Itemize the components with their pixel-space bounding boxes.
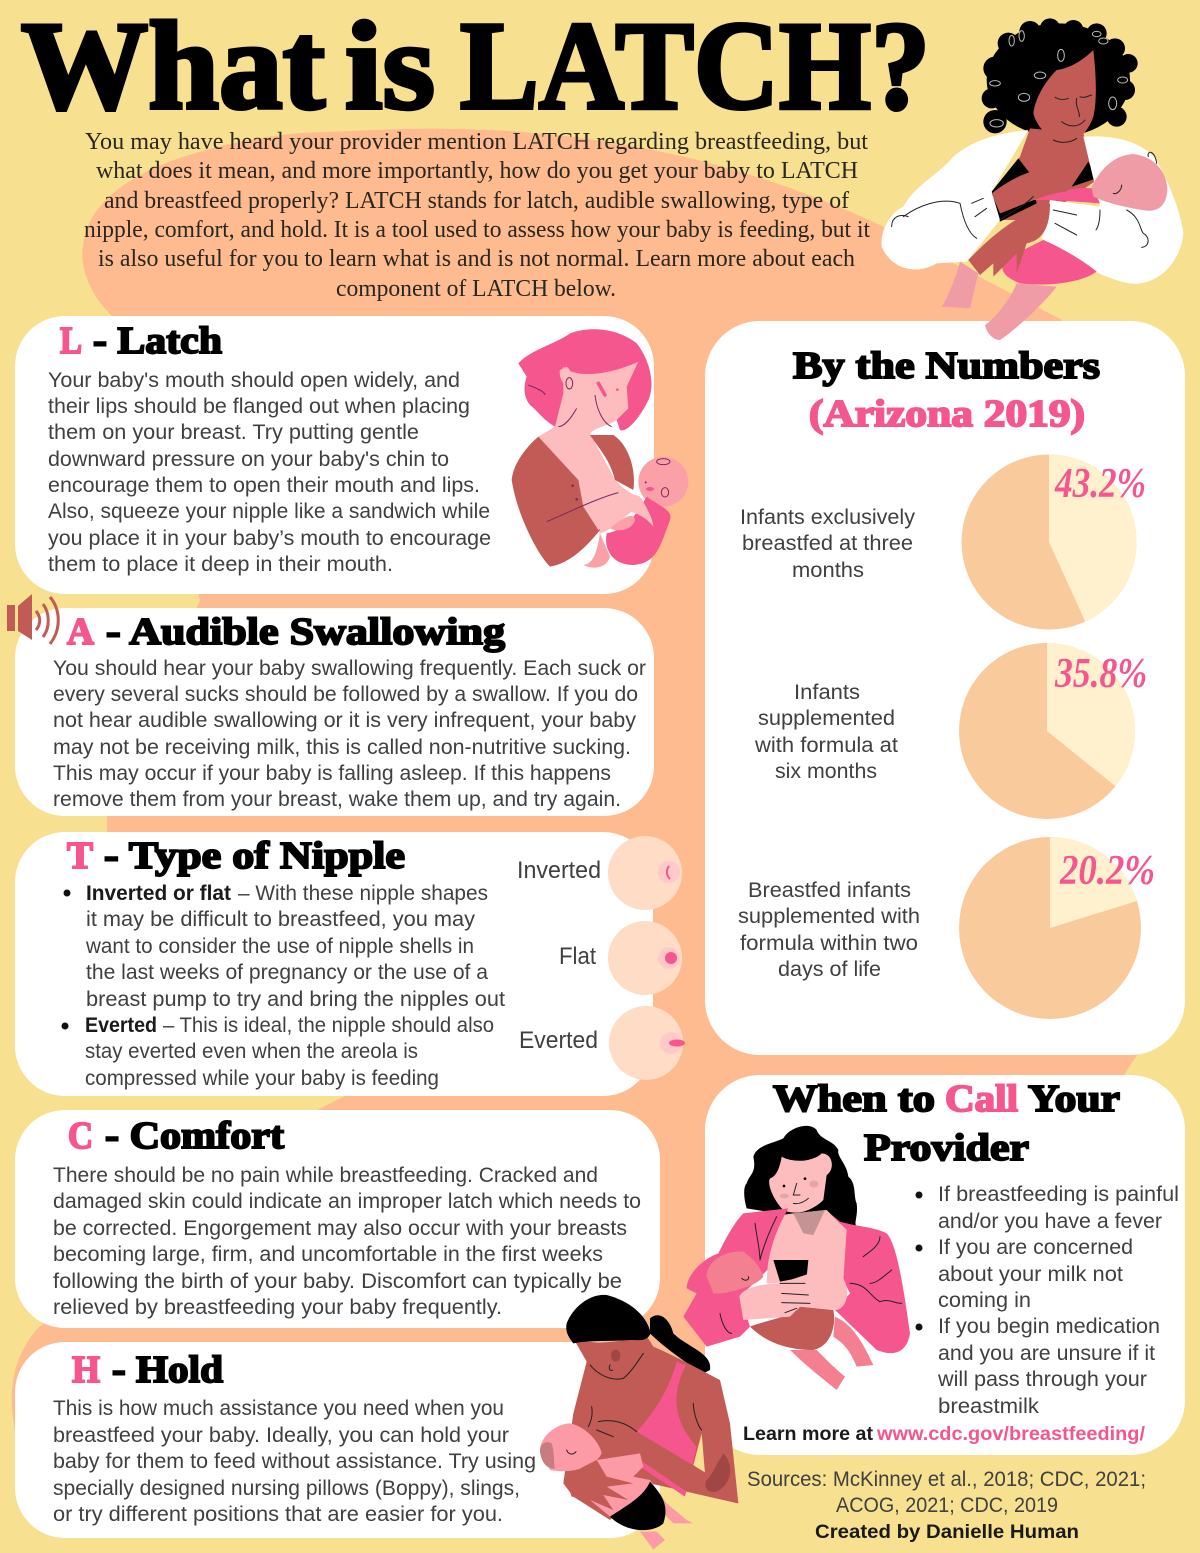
text: hold body: baby for them to feed without assistance. Try using <box>53 1450 536 1473</box>
text: when to call bullets: and/or you have a fever <box>938 1210 1162 1233</box>
text: audible swallowing body: You should hear your baby swallowing frequently. Each suck or <box>53 657 646 680</box>
intro text block: component of LATCH below. <box>336 276 616 302</box>
text: latch body: encourage them to open their mouth and lips. <box>48 474 480 497</box>
text: nipple type bullets: stay everted even when the areola is <box>85 1040 418 1063</box>
text: nipple type bullets <box>62 882 505 1090</box>
text: sources and credit: ACOG, 2021; CDC, 2019 <box>836 1494 1058 1517</box>
stat: exclusively breastfed at three months 43.2%: Infants exclusively <box>740 506 916 529</box>
stat: exclusively breastfed at three months 43.2%: 43.2% <box>1054 461 1146 507</box>
text: hold body: This is how much assistance you need when you <box>53 1397 504 1420</box>
text: latch body: their lips should be flanged out when placing <box>48 395 470 418</box>
text: sources and credit <box>747 1468 1146 1543</box>
text: audible swallowing body: may not be receiving milk, this is called non-nutritive sucking. <box>53 736 631 759</box>
heading: When to Call Your Provider: When to <box>773 1078 935 1120</box>
text: nipple type bullets: breast pump to try and bring the nipples out <box>86 988 505 1011</box>
text: comfort body: be corrected. Engorgement may also occur with your breasts <box>53 1217 627 1240</box>
text: when to call bullets: If you begin medication <box>938 1315 1160 1338</box>
text: nipple type bullets: Everted <box>85 1014 157 1037</box>
text: latch body: Your baby's mouth should open widely, and <box>48 369 460 392</box>
heading: L - Latch: - Latch <box>93 320 222 362</box>
text: when to call bullets: breastmilk <box>938 1395 1040 1418</box>
intro text block: nipple, comfort, and hold. It is a tool used to assess how your baby is feeding, but it <box>84 217 870 243</box>
stat: supplemented with formula at six months 35.8% <box>754 643 1147 819</box>
text: nipple type bullets: it may be difficult to breastfeed, you may <box>86 908 476 931</box>
text: when to call bullets: will pass through your <box>937 1368 1147 1391</box>
intro text block: You may have heard your provider mention LATCH regarding breastfeeding, but <box>85 129 868 155</box>
stat: exclusively breastfed at three months 43.2%: months <box>792 559 864 582</box>
stat: exclusively breastfed at three months 43.2% <box>740 454 1146 630</box>
heading: By the Numbers: (Arizona 2019) <box>809 393 1085 435</box>
text: audible swallowing body <box>53 657 646 811</box>
text: sources and credit: Sources: McKinney et al., 2018; CDC, 2021; <box>747 1468 1146 1491</box>
text: hold body: specially designed nursing pillows (Boppy), slings, <box>53 1477 520 1500</box>
heading: C - Comfort: C <box>68 1115 93 1157</box>
illustration: mother with dark curly hair and phone <box>683 1126 910 1390</box>
panel: H - Hold <box>15 1342 660 1538</box>
text: when to call bullets: If breastfeeding is painful <box>938 1183 1179 1206</box>
heading: H - Hold <box>72 1349 223 1391</box>
text: comfort body: following the birth of your baby. Discomfort can typically be <box>53 1270 622 1293</box>
stat: supplemented within two days of life 20.2%: supplemented with <box>738 905 920 928</box>
text: nipple type bullets: the last weeks of pregnancy or the use of a <box>86 961 488 984</box>
text: nipple type bullets: compressed while your baby is feeding <box>85 1067 439 1090</box>
stat: supplemented with formula at six months 35.8%: six months <box>775 760 877 783</box>
text: when to call bullets: coming in <box>938 1289 1031 1312</box>
text: hold body: or try different positions that are easier for you. <box>53 1503 503 1526</box>
stat: supplemented within two days of life 20.2%: 20.2% <box>1059 848 1155 894</box>
heading: By the Numbers: By the Numbers <box>793 345 1100 387</box>
text: nipple type bullets: want to consider the use of nipple shells in <box>85 935 474 958</box>
panel: A - Audible Swallowing <box>15 608 654 816</box>
text: nipple type bullets: Inverted or flat <box>86 882 231 905</box>
heading: When to Call Your Provider: Your <box>1028 1078 1120 1120</box>
text: when to call bullets: about your milk not <box>938 1263 1123 1286</box>
heading: A - Audible Swallowing: - Audible Swallowing <box>106 611 505 653</box>
panel: T - Type of Nipple <box>15 832 685 1096</box>
text: comfort body: There should be no pain while breastfeeding. Cracked and <box>53 1164 598 1187</box>
text: when to call bullets: If you are concerned <box>938 1236 1133 1259</box>
text: audible swallowing body: This may occur if your baby is falling asleep. If this happens <box>53 762 611 785</box>
stat: supplemented within two days of life 20.2%: formula within two <box>740 932 918 955</box>
text: comfort body: damaged skin could indicate an improper latch which needs to <box>53 1190 641 1213</box>
text: comfort body <box>53 1164 641 1319</box>
text: learn more link: Learn more at <box>743 1424 874 1445</box>
stat: supplemented with formula at six months 35.8%: with formula at <box>754 734 898 757</box>
heading: By the Numbers <box>793 345 1100 435</box>
panel: L - Latch <box>15 316 654 594</box>
heading: C - Comfort: - Comfort <box>105 1115 284 1157</box>
text: comfort body: becoming large, firm, and uncomfortable in the first weeks <box>53 1243 603 1266</box>
heading: H - Hold: - Hold <box>112 1349 223 1391</box>
text: comfort body: relieved by breastfeeding your baby frequently. <box>53 1296 502 1319</box>
text: hold body: breastfeed your baby. Ideally, you can hold your <box>53 1424 509 1447</box>
heading: T - Type of Nipple: T <box>67 835 93 877</box>
intro text block: what does it mean, and more importantly, how do you get your baby to LATCH <box>96 158 858 184</box>
text: latch body: downward pressure on your baby's chin to <box>48 448 449 471</box>
text: when to call bullets <box>916 1183 1179 1418</box>
title: What <box>21 0 325 136</box>
text: latch body: them on your breast. Try putting gentle <box>48 421 419 444</box>
text: when to call bullets: and you are unsure if it <box>938 1342 1155 1365</box>
intro text block: is also useful for you to learn what is and is not normal. Learn more about each <box>98 246 855 272</box>
title: LATCH? <box>460 0 930 136</box>
heading: When to Call Your Provider <box>773 1078 1120 1169</box>
text: sources and credit: Created by Danielle Human <box>815 1522 1079 1543</box>
text: latch body: you place it in your baby’s mouth to encourage <box>48 527 491 550</box>
text: learn more link <box>743 1424 1146 1445</box>
stat: supplemented within two days of life 20.2%: Breastfed infants <box>748 879 911 902</box>
title <box>21 0 930 136</box>
heading: T - Type of Nipple: - Type of Nipple <box>104 835 405 877</box>
panel: By the Numbers <box>705 321 1185 1055</box>
icon: speaker <box>7 594 58 644</box>
text: hold body <box>53 1397 536 1526</box>
title: is <box>345 0 435 136</box>
stat: supplemented with formula at six months 35.8%: 35.8% <box>1054 651 1147 697</box>
text: nipple type bullets: – This is ideal, the nipple should also <box>163 1014 494 1037</box>
text: nipple type bullets: – With these nipple shapes <box>238 882 488 905</box>
text: latch body: Also, squeeze your nipple like a sandwich while <box>48 500 490 523</box>
diagram: flat nipple <box>559 921 682 995</box>
panel: When to Call Your Provider <box>705 1075 1185 1455</box>
text: latch body: them to place it deep in their mouth. <box>48 553 393 576</box>
text: audible swallowing body: remove them from your breast, wake them up, and try again. <box>53 788 621 811</box>
heading: When to Call Your Provider: Call <box>945 1078 1018 1120</box>
diagram: inverted nipple: Inverted <box>517 857 601 884</box>
stat: supplemented with formula at six months 35.8%: supplemented <box>758 707 895 730</box>
stat: exclusively breastfed at three months 43.2%: breastfed at three <box>742 532 913 555</box>
diagram: everted nipple <box>519 1006 685 1080</box>
intro text block: and breastfeed properly? LATCH stands for latch, audible swallowing, type of <box>104 188 849 214</box>
illustration: pink-haired mother with baby <box>512 329 688 568</box>
text: latch body <box>48 369 491 576</box>
text: audible swallowing body: not hear audible swallowing or it is very infrequent, your baby <box>53 709 637 732</box>
diagram: flat nipple: Flat <box>559 943 596 970</box>
stat: supplemented with formula at six months 35.8%: Infants <box>794 681 860 704</box>
illustration: mother with ponytail nursing baby <box>540 1295 738 1549</box>
diagram: inverted nipple <box>517 836 682 910</box>
stat: supplemented within two days of life 20.2%: days of life <box>778 958 881 981</box>
intro text block <box>84 129 870 302</box>
heading: A - Audible Swallowing: A <box>67 611 95 653</box>
heading: H - Hold: H <box>72 1349 100 1391</box>
text: audible swallowing body: every several sucks should be followed by a swallow. If you do <box>53 683 638 706</box>
diagram: everted nipple: Everted <box>519 1027 598 1054</box>
text: learn more link: www.cdc.gov/breastfeeding/ <box>876 1424 1146 1445</box>
panel: C - Comfort <box>15 1110 660 1328</box>
stat: supplemented within two days of life 20.2% <box>738 837 1155 1019</box>
heading: L - Latch: L <box>60 320 82 362</box>
heading: When to Call Your Provider: Provider <box>864 1127 1029 1169</box>
illustration: mother in white robe nursing baby <box>881 18 1183 340</box>
